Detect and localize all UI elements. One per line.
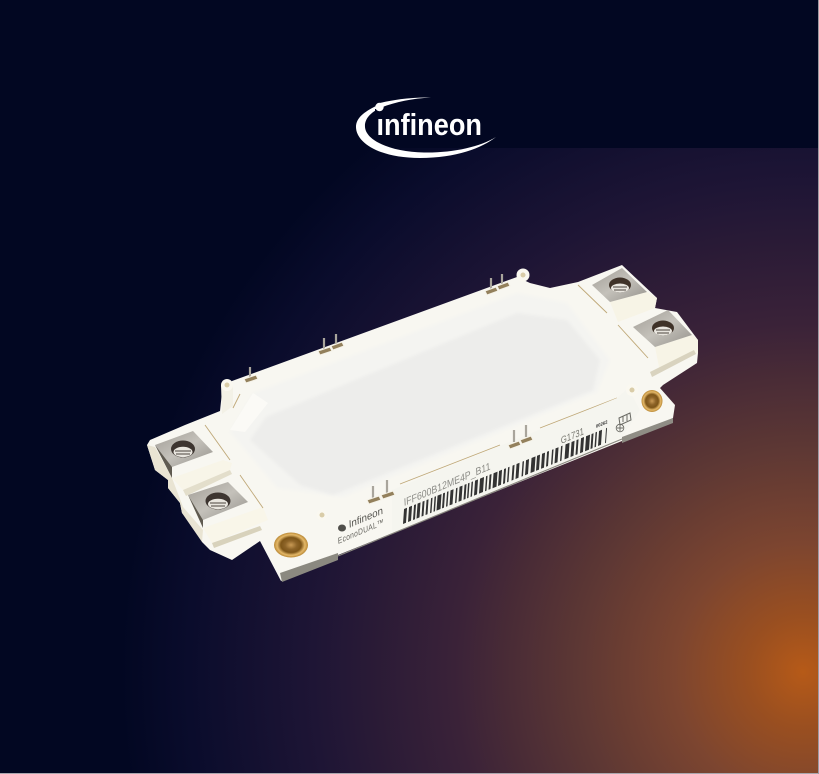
label icon: certification mark [619,413,631,425]
gold seam lines [205,285,648,508]
barcode [404,435,607,516]
connector pins [244,274,533,504]
logo: Infineon [356,97,496,158]
terminal: left upper [155,431,213,478]
product: power module [147,265,698,582]
mounting pegs [221,268,638,520]
bottom metal strip right [622,418,673,443]
mounting bush: right [642,390,662,412]
label icon: ground symbol [616,424,624,432]
logo wordmark: infineon [376,107,482,142]
block right [655,335,698,372]
recess wall [230,293,610,497]
block under upper left terminal [172,460,232,490]
block under lower left terminal [203,507,268,543]
terminal: right lower [633,310,692,347]
label text: product family: EconoDUAL™ [338,517,384,546]
terminal blocks [147,292,698,548]
lower shadow line [338,439,622,556]
groove left [212,526,262,548]
label text: brand: Infineon [349,505,383,531]
recess flat surface [250,313,600,495]
recess chamfer highlight [230,393,268,432]
mounting bush: left [274,532,308,558]
bottom metal strip left [280,553,338,582]
left peg post [221,385,233,414]
logo swoosh [356,97,496,158]
block under upper right terminal [610,292,657,322]
label strip [392,388,640,533]
terminal: right upper [592,268,647,302]
left side edge [147,445,203,542]
label icon: brand mark [338,524,346,532]
logo dot [375,103,384,111]
label text: small code: 00262 [596,419,608,429]
terminal: left lower [188,482,248,528]
label text: date code: G1731 [561,426,585,447]
module body [147,265,698,581]
groove right [650,350,696,377]
label text: part number: IFF600B12ME4P_B11 [404,460,491,509]
logo dot mask [375,109,384,118]
